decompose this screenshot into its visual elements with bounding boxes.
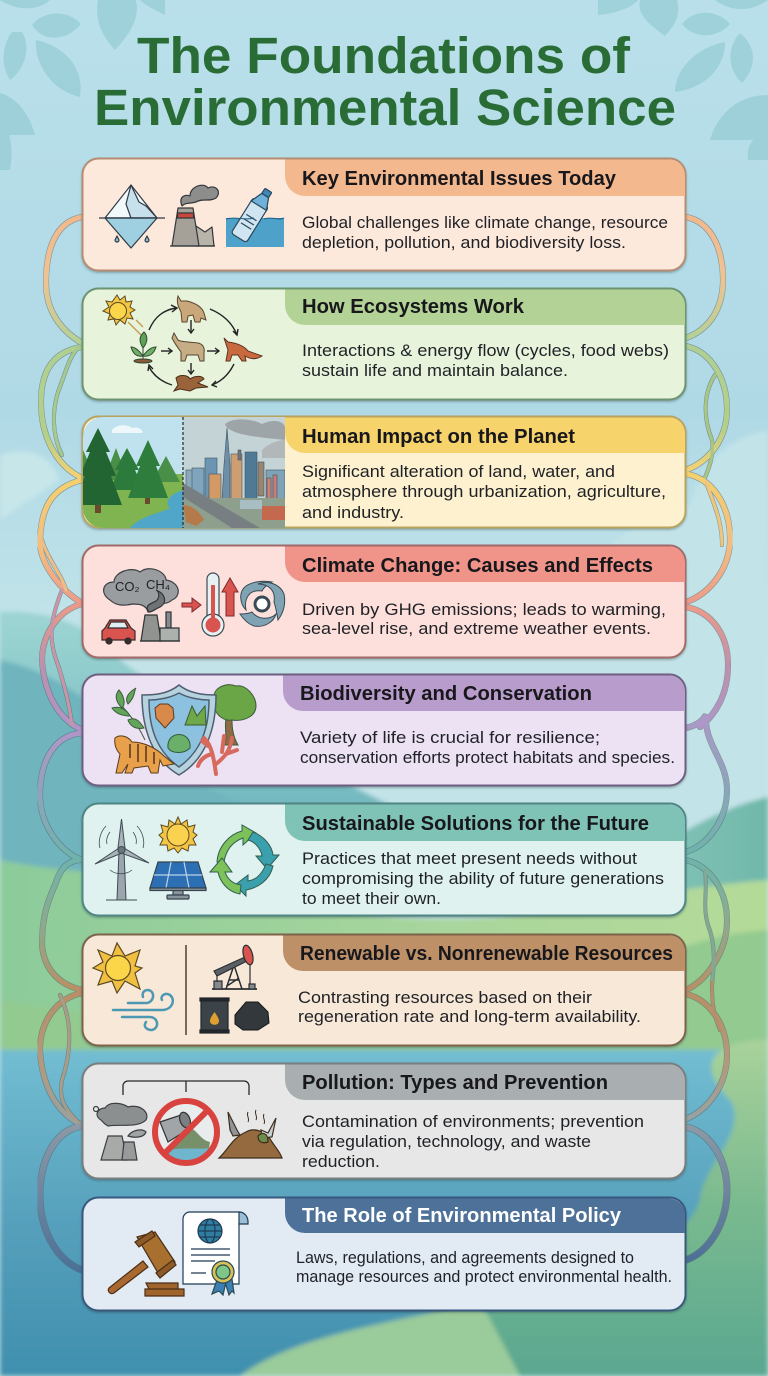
icon: ribbon seal: [212, 1261, 234, 1295]
icon: factory smokestack: [170, 185, 218, 246]
panel: pollution: via regulation, technology, and waste: [302, 1132, 591, 1151]
panel: sustainable solutions: [82, 804, 686, 916]
panel: sustainable solutions: compromising the ability of future generations: [302, 869, 664, 888]
icon: coral: [198, 736, 237, 774]
panel: key environmental issues: Global challenges like climate change, resource: [302, 213, 668, 232]
panel: human impact: Significant alteration of land, water, and: [302, 462, 615, 481]
icon: sun: [159, 817, 197, 853]
icon: decomposer matter: [174, 375, 208, 391]
icon: wolf: [177, 296, 206, 322]
icon: red arrow: [182, 598, 201, 612]
bracket: [123, 1081, 249, 1095]
icon: globe: [198, 1219, 222, 1243]
icon: sun: [103, 295, 135, 325]
decorative leaves: top right: [598, 0, 768, 160]
panel: how ecosystems work: [82, 288, 686, 400]
icon: oil barrel: [200, 998, 229, 1033]
panel: key environmental issues: depletion, pollution, and biodiversity loss.: [302, 233, 626, 252]
panel: pollution: [82, 1064, 686, 1178]
panel: how ecosystems work: Interactions & energy flow (cycles, food webs): [302, 341, 669, 360]
panel: pollution: Contamination of environments; prevention: [302, 1112, 644, 1131]
icon: waste pile: [219, 1110, 282, 1158]
icon: greenhouse gas cloud: CH₄: [146, 577, 170, 592]
title: [94, 27, 676, 136]
icon: gavel: [108, 1231, 184, 1296]
panel: climate change: Driven by GHG emissions; leads to warming,: [302, 600, 666, 619]
icon: plant: [131, 332, 156, 363]
left connectors: [40, 217, 82, 1270]
icon: deer: [172, 333, 204, 361]
icon: solar panel: [150, 862, 206, 899]
title: The Foundations of: [137, 27, 631, 84]
panel: biodiversity: conservation efforts protect habitats and species.: [300, 748, 675, 767]
icon: branch with leaves: [112, 688, 145, 740]
illustration: forest and city: [74, 417, 285, 528]
icon: no pollution sign: [153, 1099, 219, 1165]
panel: key environmental issues: Key Environmental Issues Today: [302, 168, 617, 190]
decorative leaves: top left: [0, 0, 165, 170]
icon: sun: [93, 943, 142, 993]
panel: renewable resources: [82, 934, 686, 1046]
panel: environmental policy: Laws, regulations, and agreements designed to: [296, 1248, 634, 1267]
icon: polluting plant: [94, 1103, 147, 1160]
panel: sustainable solutions: Sustainable Solutions for the Future: [302, 813, 649, 835]
icon: plastic bottle in water: [226, 186, 284, 247]
panel: environmental policy: [82, 1198, 686, 1310]
icon: bear face: [155, 704, 174, 728]
panel: pollution: Pollution: Types and Prevention: [302, 1072, 608, 1094]
panel: climate change: sea-level rise, and extreme weather events.: [302, 619, 651, 638]
divider: [185, 945, 187, 1035]
icon: tree: [213, 685, 256, 745]
panel: how ecosystems work: sustain life and maintain balance.: [302, 361, 568, 380]
panel: climate change: [82, 546, 686, 658]
panel: human impact: [74, 416, 686, 528]
right connectors: [686, 217, 730, 1260]
icon: recycle arrows: [210, 825, 279, 896]
panel: environmental policy: The Role of Environmental Policy: [302, 1205, 622, 1227]
panel: renewable resources: Contrasting resources based on their: [298, 988, 592, 1007]
icon: coal: [235, 1002, 269, 1030]
panel: pollution: reduction.: [302, 1152, 380, 1171]
panel: renewable resources: Renewable vs. Nonrenewable Resources: [300, 943, 673, 965]
panel: how ecosystems work: How Ecosystems Work: [302, 296, 525, 318]
icon: thermometer: [202, 573, 224, 636]
panel: human impact: and industry.: [302, 503, 404, 522]
icon: wind turbine: [95, 819, 149, 900]
icon: policy document: [183, 1212, 248, 1284]
panel: sustainable solutions: Practices that meet present needs without: [302, 849, 637, 868]
icon: greenhouse gas cloud: CO₂: [115, 579, 140, 594]
icon: greenhouse gas cloud: [104, 569, 178, 612]
icon: food web arrows: [128, 305, 238, 387]
panel: climate change: Climate Change: Causes and Effects: [302, 555, 653, 577]
panel: renewable resources: regeneration rate and long-term availability.: [298, 1007, 641, 1026]
icon: seashell: [168, 734, 190, 752]
icon: fox: [224, 338, 262, 361]
icon: shield plant: [185, 706, 206, 725]
icon: car: [102, 620, 135, 644]
icon: cyclone: [240, 581, 285, 626]
panel: human impact: atmosphere through urbanization, agriculture,: [302, 482, 666, 501]
icon: tiger: [115, 736, 174, 773]
icon: protection shield: [142, 685, 216, 775]
panel: key environmental issues: [82, 158, 686, 270]
icon: rising arrow: [222, 578, 238, 616]
panel: human impact: Human Impact on the Planet: [302, 426, 575, 448]
icon: wind lines: [113, 990, 173, 1030]
icon: power plant: [140, 590, 180, 641]
panel: environmental policy: manage resources and protect environmental health.: [296, 1267, 672, 1286]
title: Environmental Science: [94, 79, 676, 136]
panel: biodiversity: [82, 674, 686, 786]
icon: iceberg: [99, 185, 165, 248]
panel: biodiversity: Variety of life is crucial for resilience;: [300, 728, 600, 747]
panel: biodiversity: Biodiversity and Conservation: [300, 683, 592, 705]
panel: sustainable solutions: to meet their own.: [302, 889, 441, 908]
icon: oil pumpjack: [212, 944, 257, 989]
